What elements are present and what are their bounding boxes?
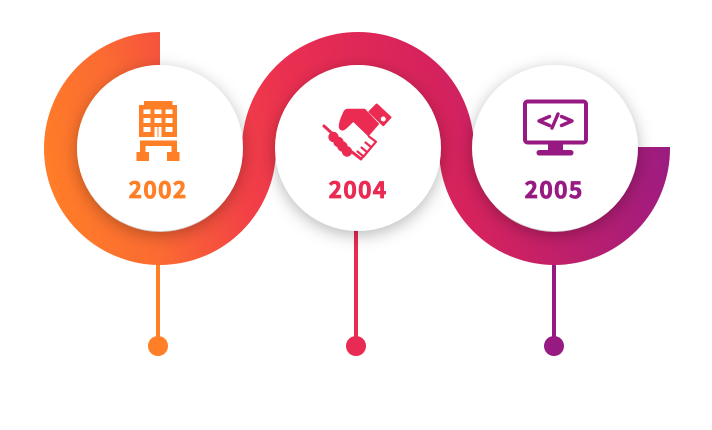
year: 2002: 2002: [128, 171, 188, 205]
year: 2005: 2005: [524, 171, 584, 205]
connector: 2004: [346, 228, 366, 356]
circle: 2004: [275, 65, 441, 231]
icon: code monitor: [525, 102, 586, 156]
circle: 2005: [472, 65, 638, 231]
connector: 2005: [544, 262, 564, 356]
connector: 2002: [148, 262, 168, 356]
gradient ribbon: [60, 48, 653, 249]
icon: handshake: [324, 104, 390, 159]
year: 2004: 2004: [328, 171, 388, 205]
circle: 2002: [77, 65, 243, 231]
icon: office building: [136, 101, 180, 161]
